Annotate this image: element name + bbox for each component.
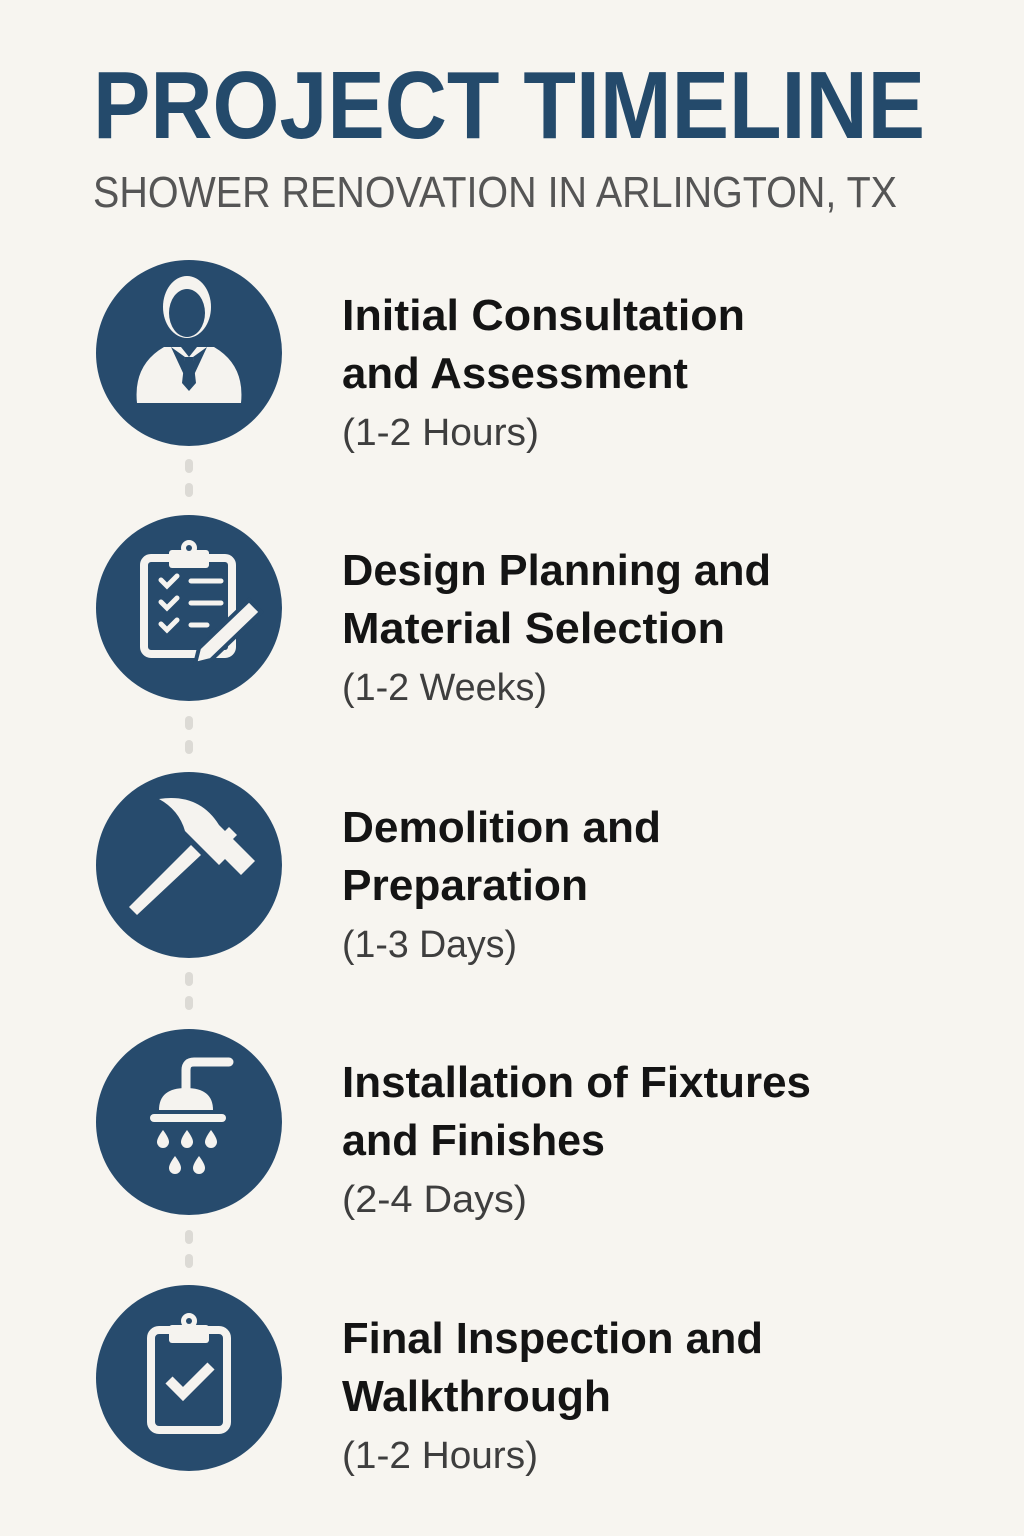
step 3 text: Demolition and [342,803,661,852]
step 4 text: and Finishes [342,1116,605,1165]
icon: hammer [96,772,282,958]
step 2 text: Material Selection [342,604,725,653]
icon: shower head [96,1029,282,1215]
step 3 text: Preparation [342,861,588,910]
step 2 text [342,546,771,709]
step 4 text: Installation of Fixtures [342,1058,811,1107]
step 4 text [342,1058,811,1221]
icon: person consultant [96,260,282,446]
step 3 text: (1-3 Days) [342,924,517,966]
step 5 text: Walkthrough [342,1372,611,1421]
step 1 text: Initial Consultation [342,291,745,340]
step 5 text: (1-2 Hours) [342,1435,538,1477]
step 2 text: (1-2 Weeks) [342,667,547,709]
step 2 text: Design Planning and [342,546,771,595]
step 5 text: Final Inspection and [342,1314,763,1363]
connector dashes [185,459,193,1268]
step 5 text [342,1314,763,1477]
icon: clipboard checklist with pencil [96,515,282,701]
subtitle: SHOWER RENOVATION IN ARLINGTON, TX [93,168,897,217]
step 1 text: (1-2 Hours) [342,412,539,454]
title: PROJECT TIMELINE [93,52,925,159]
step 1 text: and Assessment [342,349,688,398]
step 4 text: (2-4 Days) [342,1179,527,1221]
step 1 text [342,291,745,454]
icon: clipboard check [96,1285,282,1471]
step 3 text [342,803,661,966]
